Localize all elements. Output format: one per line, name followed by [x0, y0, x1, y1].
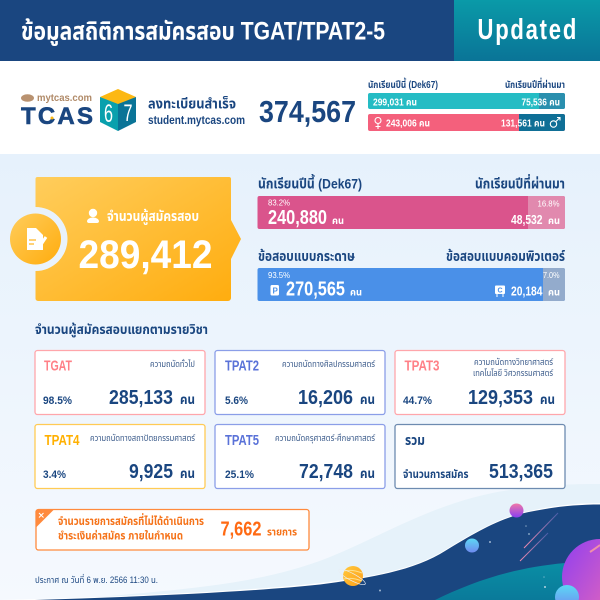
card: total: 513,365 — [489, 461, 553, 483]
panel: exam format bar: 20,184 — [511, 284, 543, 298]
registered label — [148, 96, 245, 127]
card: TPAT5: 72,748 — [299, 461, 353, 483]
logo: mytcas TCAS 67: TCAS — [21, 103, 93, 130]
callout: unpaid registrations: จำนวนรายการสมัครที่ไม่ได้ดำเนินการ — [58, 513, 204, 528]
card: TPAT3: 44.7% — [403, 395, 432, 407]
bar: students: 75,536 คน — [522, 98, 560, 108]
card: TPAT4: 9,925 — [129, 461, 173, 483]
icon: computer exam — [495, 286, 505, 297]
card: TPAT5: TPAT5 — [225, 432, 259, 449]
bar labels: นักเรียนปีนี้ (Dek67) — [368, 77, 438, 91]
panel: exam format bar: 7.0% — [543, 271, 560, 280]
panel: exam format bar: 270,565 — [286, 278, 345, 300]
card: TPAT2 — [215, 350, 385, 414]
bar: students: 299,031 คน — [373, 98, 417, 108]
card: TPAT4: TPAT4 — [44, 432, 80, 449]
card: TPAT3: คน — [540, 392, 555, 407]
card: TPAT5 — [215, 424, 385, 488]
panel: exam format bar: คน — [350, 288, 362, 298]
card: TPAT2: ความถนัดทางศิลปกรรมศาสตร์ — [282, 359, 375, 369]
planet: pink — [510, 504, 524, 518]
icon: female — [375, 118, 381, 129]
big number: 289,412 — [78, 233, 212, 277]
bar: students — [368, 93, 565, 109]
registration panel — [0, 61, 600, 154]
logo: mytcas TCAS 67: mytcas.com — [37, 92, 92, 104]
card: TPAT2: 16,206 — [298, 387, 353, 409]
card: TPAT3 — [395, 350, 565, 414]
card: TGAT: 285,133 — [109, 387, 173, 409]
bar: gender — [368, 114, 565, 131]
panel: exam format bar: ข้อสอบแบบกระดาษ — [258, 248, 355, 264]
card: TPAT4: 3.4% — [43, 469, 66, 481]
logo: mytcas TCAS 67: 7 — [124, 100, 132, 127]
icon: computer exam: C — [498, 288, 503, 294]
panel: exam format bar: 93.5% — [268, 271, 290, 280]
panel: student type bar: 16.8% — [538, 200, 560, 208]
card: total — [395, 424, 565, 488]
card: TGAT: ความถนัดทั่วไป — [150, 358, 195, 369]
icon: cross — [39, 513, 44, 518]
registered label: student.mytcas.com — [148, 113, 245, 127]
background: waves and planets — [0, 484, 600, 600]
planet: large purple — [562, 539, 600, 600]
page background — [0, 154, 600, 600]
card: total: จำนวนการสมัคร — [403, 468, 469, 481]
total registered: 374,567 — [259, 94, 356, 129]
callout: unpaid registrations: รายการ — [267, 526, 297, 538]
panel: student type bar: 48,532 — [511, 212, 542, 227]
card: TGAT: คน — [180, 392, 195, 407]
card: TGAT: TGAT — [44, 358, 72, 374]
card: TPAT3: 129,353 — [468, 387, 533, 409]
panel: exam format bar: ข้อสอบแบบคอมพิวเตอร์ — [446, 248, 565, 264]
icon: document with pen — [10, 214, 61, 264]
icon: paper exam: P — [272, 286, 278, 296]
panel: exam format bar: คน — [548, 288, 560, 298]
card: TPAT2: TPAT2 — [225, 358, 259, 374]
panel: student type bar — [258, 173, 565, 229]
title: ข้อมูลสถิติการสมัครสอบ TGAT/TPAT2-5 — [21, 18, 385, 46]
card: TPAT4: คน — [180, 466, 195, 481]
planet: yellow ringed — [337, 566, 367, 587]
bar labels: นักเรียนปีที่ผ่านมา — [505, 77, 565, 91]
card: total: รวม — [405, 432, 425, 448]
panel: student type bar: คน — [332, 216, 344, 227]
card: TPAT5: 25.1% — [225, 469, 254, 481]
callout: unpaid registrations: 7,662 — [220, 518, 262, 540]
icon: paper exam — [270, 285, 279, 296]
card: TPAT4: ความถนัดทางสถาปัตยกรรมศาสตร์ — [90, 433, 195, 443]
panel: student type bar: นักเรียนปีนี้ (Dek67) — [258, 173, 362, 192]
panel: student type bar: 83.2% — [268, 198, 290, 208]
planet: blue — [465, 538, 479, 552]
panel: exam format bar — [258, 248, 565, 301]
panel: total applicants — [36, 177, 241, 301]
icon: person — [87, 209, 99, 223]
bar: gender: 243,006 คน — [386, 118, 430, 130]
section heading: จำนวนผู้สมัครสอบแยกตามรายวิชา — [35, 322, 208, 338]
card: TGAT — [35, 350, 205, 414]
card: TPAT3: TPAT3 — [404, 358, 440, 374]
callout: unpaid registrations — [36, 510, 309, 550]
icon: male — [550, 118, 560, 127]
registered label: ลงทะเบียนสำเร็จ — [148, 96, 236, 112]
card: TGAT: 98.5% — [43, 395, 72, 407]
bar: gender: 131,561 คน — [501, 118, 545, 130]
updated badge — [454, 0, 600, 61]
card: TPAT3: เทคโนโลยี วิศวกรรมศาสตร์ — [473, 368, 553, 378]
updated badge: Updated — [478, 14, 576, 46]
header bar — [0, 0, 454, 61]
card: TPAT5: ความถนัดครุศาสตร์-ศึกษาศาสตร์ — [275, 433, 375, 443]
logo: mytcas TCAS 67: 6 — [104, 100, 113, 128]
footer date: ประกาศ ณ วันที่ 6 พ.ย. 2566 11:30 น. — [35, 573, 158, 585]
card: TPAT2: คน — [360, 392, 375, 407]
panel: student type bar: คน — [548, 216, 560, 227]
bar labels — [368, 77, 565, 91]
panel: student type bar: นักเรียนปีที่ผ่านมา — [475, 173, 565, 192]
card: TPAT3: ความถนัดทางวิทยาศาสตร์ — [474, 357, 553, 367]
card: TPAT4 — [35, 424, 205, 488]
panel: student type bar: 240,880 — [268, 207, 327, 229]
card: TPAT2: 5.6% — [225, 395, 248, 407]
callout: unpaid registrations: ชำระเงินค่าสมัคร ภายในกำหนด — [58, 528, 183, 542]
label: จำนวนผู้สมัครสอบ — [107, 208, 199, 226]
planet: small blue — [555, 585, 579, 600]
logo: mytcas TCAS 67 — [21, 89, 136, 131]
card: TPAT5: คน — [360, 466, 375, 481]
